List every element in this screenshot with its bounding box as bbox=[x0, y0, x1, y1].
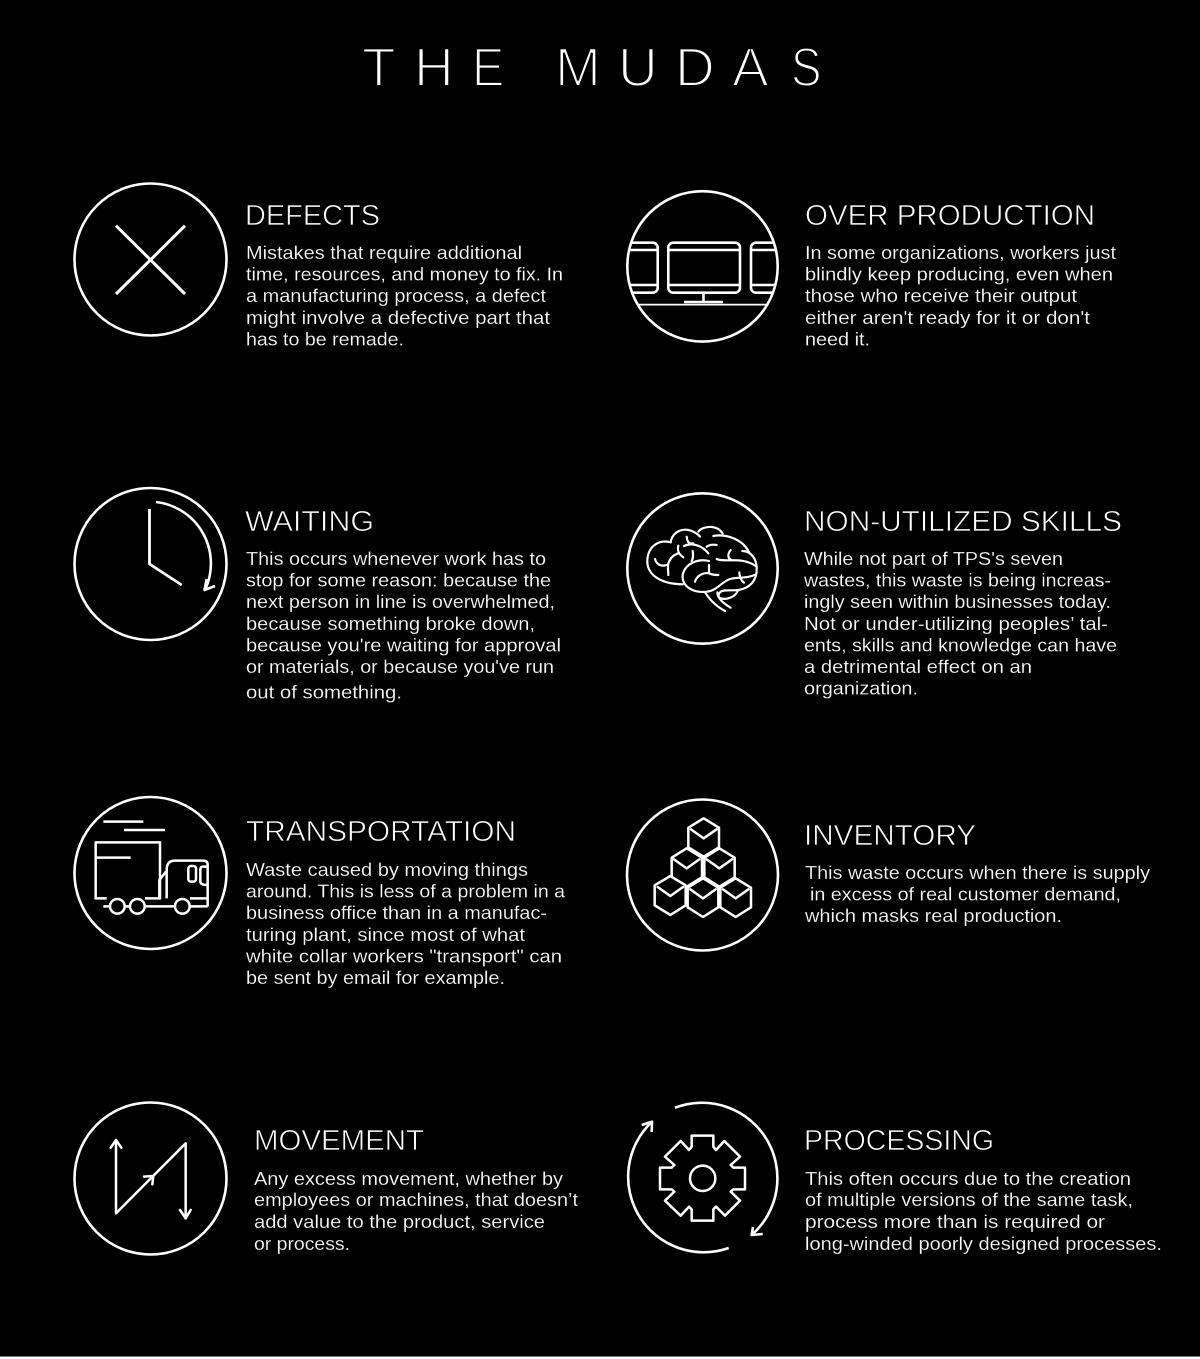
heading: transportation: TRANSPORTATION bbox=[246, 816, 516, 848]
text: over production description: those who receive their output bbox=[805, 286, 1077, 306]
text: waiting description: out of something. bbox=[246, 682, 402, 702]
text: non-utilized skills description: ingly seen within businesses today. bbox=[804, 592, 1111, 612]
text: processing description: of multiple versions of the same task, bbox=[805, 1190, 1133, 1210]
heading: movement: MOVEMENT bbox=[254, 1125, 424, 1157]
text: movement description: employees or machines, that doesn’t bbox=[254, 1190, 578, 1210]
icon: gear with cycle arrows bbox=[628, 1103, 777, 1252]
text: waiting description: because you're waiting for approval bbox=[246, 636, 561, 656]
text: non-utilized skills description: organization. bbox=[804, 678, 918, 698]
panel: non-utilized skills bbox=[627, 493, 1122, 698]
text: waiting description bbox=[246, 549, 561, 702]
text: waiting description: This occurs whenever work has to bbox=[246, 549, 546, 569]
text: defects description: time, resources, and money to fix. In bbox=[246, 264, 563, 284]
text: waiting description: stop for some reason: because the bbox=[246, 570, 551, 590]
title bbox=[362, 36, 822, 98]
title: E bbox=[472, 36, 504, 98]
text: non-utilized skills description: Not or under-utilizing peoples’ tal- bbox=[804, 614, 1108, 634]
text: processing description: long-winded poorly designed processes. bbox=[805, 1234, 1162, 1254]
heading: waiting: WAITING bbox=[245, 506, 374, 538]
text: processing description: process more than is required or bbox=[805, 1212, 1105, 1232]
panel: transportation bbox=[74, 797, 566, 988]
text: waiting description: next person in line is overwhelmed, bbox=[246, 592, 555, 612]
text: inventory description: This waste occurs when there is supply bbox=[805, 863, 1150, 883]
text: over production description: need it. bbox=[805, 330, 870, 350]
text: movement description: or process. bbox=[254, 1234, 350, 1254]
heading: defects: DEFECTS bbox=[245, 200, 380, 232]
text: non-utilized skills description: While not part of TPS's seven bbox=[804, 549, 1063, 569]
text: defects description: might involve a defective part that bbox=[246, 308, 550, 328]
icon: truck bbox=[74, 797, 226, 949]
text: defects description: a manufacturing process, a defect bbox=[246, 286, 546, 306]
title: U bbox=[618, 36, 658, 98]
icon: row of monitors bbox=[626, 190, 779, 343]
text: over production description: In some organizations, workers just bbox=[805, 243, 1116, 263]
text: transportation description bbox=[245, 860, 566, 988]
title: H bbox=[414, 36, 454, 98]
text: defects description: Mistakes that require additional bbox=[246, 243, 522, 263]
text: processing description bbox=[805, 1169, 1162, 1254]
text: inventory description: in excess of real customer demand, bbox=[810, 884, 1121, 904]
title: M bbox=[555, 36, 601, 98]
panel: movement bbox=[74, 1102, 578, 1254]
text: non-utilized skills description: a detrimental effect on an bbox=[804, 657, 1032, 677]
text: non-utilized skills description: ents, skills and knowledge can have bbox=[804, 636, 1117, 656]
title: S bbox=[791, 36, 822, 98]
text: processing description: This often occurs due to the creation bbox=[805, 1169, 1131, 1189]
title: T bbox=[362, 36, 396, 98]
text: inventory description: which masks real production. bbox=[804, 906, 1062, 926]
text: movement description: add value to the product, service bbox=[254, 1212, 545, 1232]
heading: over production: OVER PRODUCTION bbox=[805, 200, 1095, 232]
panel: processing bbox=[628, 1103, 1162, 1254]
text: transportation description: white collar workers "transport" can bbox=[245, 946, 562, 966]
text: waiting description: because something broke down, bbox=[246, 614, 535, 634]
text: inventory description bbox=[804, 863, 1150, 926]
title: A bbox=[732, 36, 769, 98]
icon: stacked cubes bbox=[627, 800, 778, 950]
text: non-utilized skills description: wastes, this waste is being increas- bbox=[803, 570, 1111, 590]
text: defects description bbox=[246, 243, 563, 350]
text: waiting description: or materials, or because you've run bbox=[246, 657, 554, 677]
text: non-utilized skills description bbox=[803, 549, 1117, 698]
text: transportation description: turing plant, since most of what bbox=[246, 925, 525, 945]
text: over production description: blindly keep producing, even when bbox=[805, 264, 1113, 284]
icon: brain bbox=[627, 493, 778, 644]
text: transportation description: business office than in a manufac- bbox=[246, 903, 547, 923]
panel: over production bbox=[590, 191, 1116, 350]
icon: clock bbox=[74, 488, 226, 640]
panel: waiting bbox=[74, 488, 561, 702]
heading: non-utilized skills: NON-UTILIZED SKILLS bbox=[804, 506, 1122, 538]
text: over production description bbox=[805, 243, 1116, 350]
panel: inventory bbox=[627, 800, 1150, 950]
text: defects description: has to be remade. bbox=[246, 330, 404, 350]
heading: inventory: INVENTORY bbox=[804, 820, 976, 852]
title: D bbox=[675, 36, 715, 98]
text: movement description: Any excess movement, whether by bbox=[254, 1169, 563, 1189]
icon: zigzag arrows bbox=[74, 1102, 226, 1254]
text: transportation description: around. This is less of a problem in a bbox=[246, 882, 566, 902]
text: transportation description: Waste caused by moving things bbox=[246, 860, 528, 880]
text: over production description: either aren't ready for it or don't bbox=[805, 308, 1090, 328]
text: transportation description: be sent by email for example. bbox=[246, 968, 505, 988]
text: movement description bbox=[254, 1169, 578, 1254]
panel: defects bbox=[74, 184, 563, 350]
icon: defects cross bbox=[74, 184, 226, 336]
heading: processing: PROCESSING bbox=[804, 1125, 994, 1157]
